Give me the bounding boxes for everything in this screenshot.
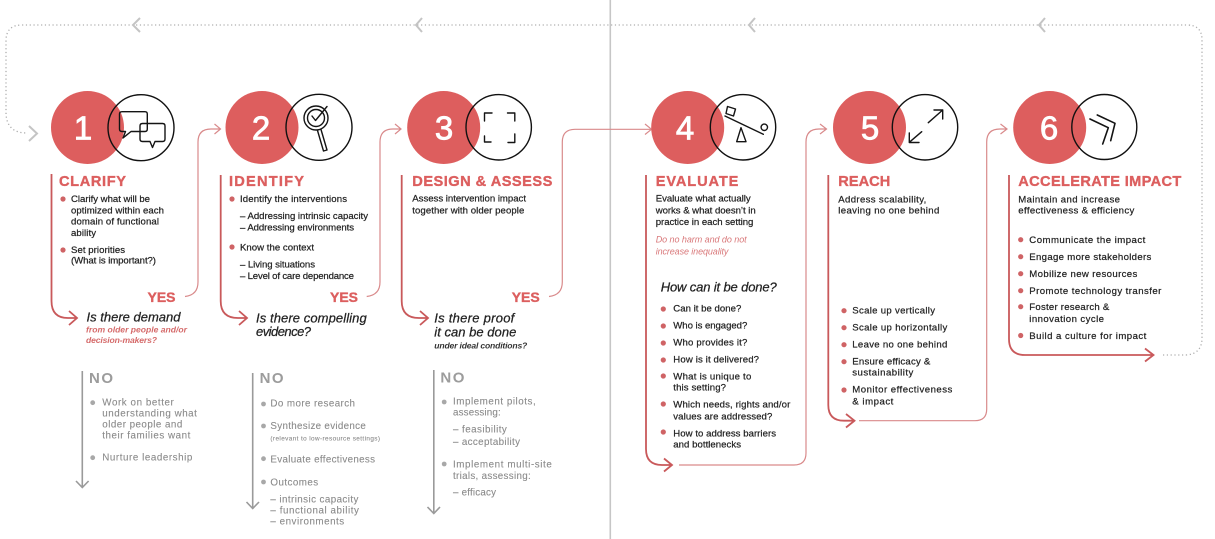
icon: step 1 number badge: [51, 91, 124, 164]
text block: no branch 1: Work on better: [102, 398, 175, 409]
arrow: evaluate to step 5: [679, 124, 826, 465]
text block: no branch 2: – environments: [270, 517, 344, 528]
heading: design and assess: DESIGN & ASSESS: [412, 174, 553, 190]
text block: evaluate intro: works & what doesn’t in: [655, 206, 756, 217]
text block: accelerate intro: Maintain and increase: [1018, 195, 1120, 206]
icon: step 4 number badge: 4: [676, 110, 694, 146]
text block: no branch 3: – feasibility: [453, 425, 507, 436]
heading: reach: REACH: [838, 174, 890, 190]
text block: evaluate bullets: values are addressed?: [673, 412, 772, 423]
icon: speech bubbles: [108, 95, 174, 161]
text block: no branch 2: Synthesize evidence: [270, 421, 366, 432]
label: yes: YES: [512, 289, 540, 305]
question: demand: Is there demand: [86, 310, 181, 324]
callout: do no harm: [656, 235, 747, 257]
text block: evaluate intro: Evaluate what actually: [656, 194, 751, 205]
icon: step 3 number badge: 3: [435, 110, 453, 146]
arrow: yes to step 4: [549, 124, 652, 296]
text block: no branch 3: trials, assessing:: [453, 471, 531, 482]
icon: double chevron: [1072, 94, 1137, 160]
callout: do no harm: Do no harm and do not: [656, 235, 747, 245]
text block: evaluate bullets: Can it be done?: [673, 304, 741, 315]
text block: no branch 3: assessing:: [453, 408, 501, 419]
text block: reach bullets: Ensure efficacy &: [852, 357, 931, 368]
label: yes: YES: [330, 289, 358, 305]
text block: no branch 2: Evaluate effectiveness: [270, 455, 375, 466]
heading: accelerate impact: ACCELERATE IMPACT: [1018, 174, 1181, 190]
icon: step 2 number badge: 2: [252, 110, 270, 146]
text block: identify bullets: Know the context: [240, 243, 314, 254]
callout: do no harm: increase inequality: [656, 247, 729, 257]
text block: reach bullets: Scale up horizontally: [852, 323, 948, 334]
text block: no branch 2: [261, 399, 380, 528]
question: how can it be done: How can it be done?: [661, 280, 777, 295]
text block: evaluate bullets: [661, 304, 791, 451]
question: demand: [86, 310, 188, 345]
text block: design and assess: [412, 194, 526, 217]
heading: identify: IDENTIFY: [229, 174, 304, 190]
text block: no branch 1: their families want: [102, 431, 191, 442]
text block: reach bullets: & impact: [852, 396, 894, 407]
question: proof: [434, 310, 528, 350]
icon: focus frame: [466, 95, 531, 160]
text block: accelerate bullets: Engage more stakeholders: [1029, 252, 1152, 263]
arrow: identify to question: [221, 175, 247, 325]
text block: reach intro: [838, 195, 939, 217]
text block: clarify bullets: optimized within each: [71, 205, 164, 216]
text block: no branch 2: – functional ability: [270, 506, 359, 517]
text block: no branch 3: Implement multi-site: [453, 460, 552, 471]
dotted feedback loop arrow: [6, 18, 1202, 355]
arrow: design to question: [402, 175, 428, 325]
text block: no branch 1: understanding what: [102, 409, 197, 420]
icon: step 3 number badge: [407, 91, 480, 164]
text block: clarify bullets: ability: [71, 228, 96, 239]
label: yes: YES: [148, 289, 176, 305]
heading: clarify: CLARIFY: [59, 174, 126, 190]
icon: step 5 number badge: [833, 91, 906, 164]
question: compelling evidence: Is there compelling: [256, 310, 367, 325]
text block: evaluate bullets: What is unique to: [673, 372, 751, 383]
text block: no branch 3: – acceptability: [453, 437, 520, 448]
icon: step 2 number badge: [226, 91, 298, 164]
label: no: NO: [260, 370, 284, 387]
text block: evaluate intro: [655, 194, 756, 228]
text block: reach bullets: [841, 306, 953, 407]
text block: clarify bullets: Set priorities: [71, 245, 125, 256]
arrow: accelerate stem: [1009, 175, 1154, 362]
question: demand: from older people and/or: [86, 324, 188, 334]
arrow: reach stem: [828, 175, 854, 428]
text block: identify bullets: – Addressing environments: [240, 223, 354, 234]
text block: reach bullets: sustainability: [852, 368, 914, 379]
arrow: yes to step 3: [367, 124, 401, 296]
text block: identify bullets: Identify the interventions: [240, 194, 347, 205]
text block: no branch 1: [90, 398, 197, 464]
icon: step 5 number badge: 5: [861, 110, 879, 146]
label: no: NO: [89, 370, 113, 387]
arrow: no branch 1: [76, 371, 89, 488]
icon: step 4 number badge: [651, 91, 724, 164]
text block: reach bullets: Monitor effectiveness: [852, 385, 953, 396]
icon: step 6 number badge: 6: [1040, 110, 1058, 146]
label: no: NO: [440, 369, 465, 386]
question: compelling evidence: [256, 310, 367, 339]
step 5: reach: [828, 91, 1007, 428]
question: compelling evidence: evidence?: [256, 324, 312, 339]
icon: step 1 number badge: 1: [74, 110, 92, 146]
text block: no branch 1: Nurture leadership: [102, 453, 193, 464]
text block: evaluate bullets: Who provides it?: [673, 338, 747, 349]
text block: no branch 1: older people and: [102, 420, 182, 431]
text block: accelerate intro: [1018, 195, 1135, 217]
step 1: clarify: [51, 91, 220, 488]
text block: accelerate bullets: Mobilize new resources: [1029, 269, 1138, 280]
text block: accelerate bullets: [1018, 235, 1162, 342]
text block: no branch 2: (relevant to low-resource settings): [270, 435, 380, 442]
question: proof: under ideal conditions?: [434, 340, 528, 350]
text block: reach bullets: Leave no one behind: [852, 340, 947, 351]
text block: accelerate bullets: Communicate the impact: [1029, 235, 1146, 246]
text block: no branch 3: [442, 397, 552, 499]
text block: clarify bullets: [60, 194, 164, 266]
text block: clarify bullets: domain of functional: [71, 217, 159, 228]
text block: design and assess: together with older people: [412, 206, 524, 217]
text block: identify bullets: – Living situations: [240, 260, 315, 271]
arrow: no branch 3: [428, 370, 440, 514]
text block: reach intro: Address scalability,: [838, 195, 926, 206]
step 2: identify: [221, 91, 401, 528]
arrow: reach to step 6: [859, 124, 1007, 421]
text block: accelerate bullets: Promote technology transfer: [1029, 286, 1162, 297]
text block: identify bullets: – Addressing intrinsic capacity: [240, 211, 368, 222]
text block: evaluate bullets: Which needs, rights and/or: [673, 400, 791, 411]
arrow: no branch 2: [246, 373, 259, 508]
icon: step 6 number badge: [1013, 91, 1086, 164]
text block: no branch 2: – intrinsic capacity: [270, 495, 358, 506]
question: proof: it can be done: [434, 325, 516, 340]
icon: diverging arrows: [892, 95, 958, 160]
text block: design and assess: Assess intervention impact: [412, 194, 526, 205]
text block: accelerate bullets: Build a culture for impact: [1029, 331, 1147, 342]
text block: evaluate bullets: How to address barriers: [673, 429, 776, 440]
icon: magnifier with check: [286, 94, 352, 160]
question: demand: decision-makers?: [86, 335, 158, 345]
text block: evaluate bullets: How is it delivered?: [673, 355, 759, 366]
text block: reach intro: leaving no one behind: [838, 206, 939, 217]
text block: accelerate intro: effectiveness & efficiency: [1018, 206, 1135, 217]
text block: evaluate bullets: and bottlenecks: [673, 440, 741, 451]
text block: no branch 2: Outcomes: [270, 477, 318, 488]
step 3: design and assess: [402, 91, 652, 514]
text block: no branch 2: Do more research: [270, 399, 355, 410]
text block: evaluate intro: practice in each setting: [656, 217, 753, 228]
question: proof: Is there proof: [434, 310, 516, 325]
text block: no branch 3: – efficacy: [453, 488, 496, 499]
text block: evaluate bullets: this setting?: [673, 383, 726, 394]
text block: clarify bullets: Clarify what will be: [71, 194, 150, 205]
step 6: accelerate impact: [1009, 91, 1181, 362]
arrow: yes to step 2: [185, 124, 220, 296]
heading: evaluate: EVALUATE: [656, 174, 739, 190]
text block: clarify bullets: (What is important?): [71, 256, 156, 266]
text block: identify bullets: – Level of care dependance: [240, 271, 354, 282]
arrow: clarify to question: [52, 174, 77, 325]
text block: accelerate bullets: Foster research &: [1029, 302, 1110, 313]
text block: evaluate bullets: Who is engaged?: [673, 321, 747, 332]
centre divider: [610, 0, 611, 539]
arrow: evaluate stem: [646, 175, 672, 472]
text block: identify bullets: [229, 194, 368, 282]
text block: no branch 3: Implement pilots,: [453, 397, 536, 408]
text block: reach bullets: Scale up vertically: [852, 306, 935, 317]
step 4: evaluate: [646, 91, 826, 472]
text block: accelerate bullets: innovation cycle: [1029, 314, 1104, 325]
icon: seesaw: [710, 95, 776, 160]
